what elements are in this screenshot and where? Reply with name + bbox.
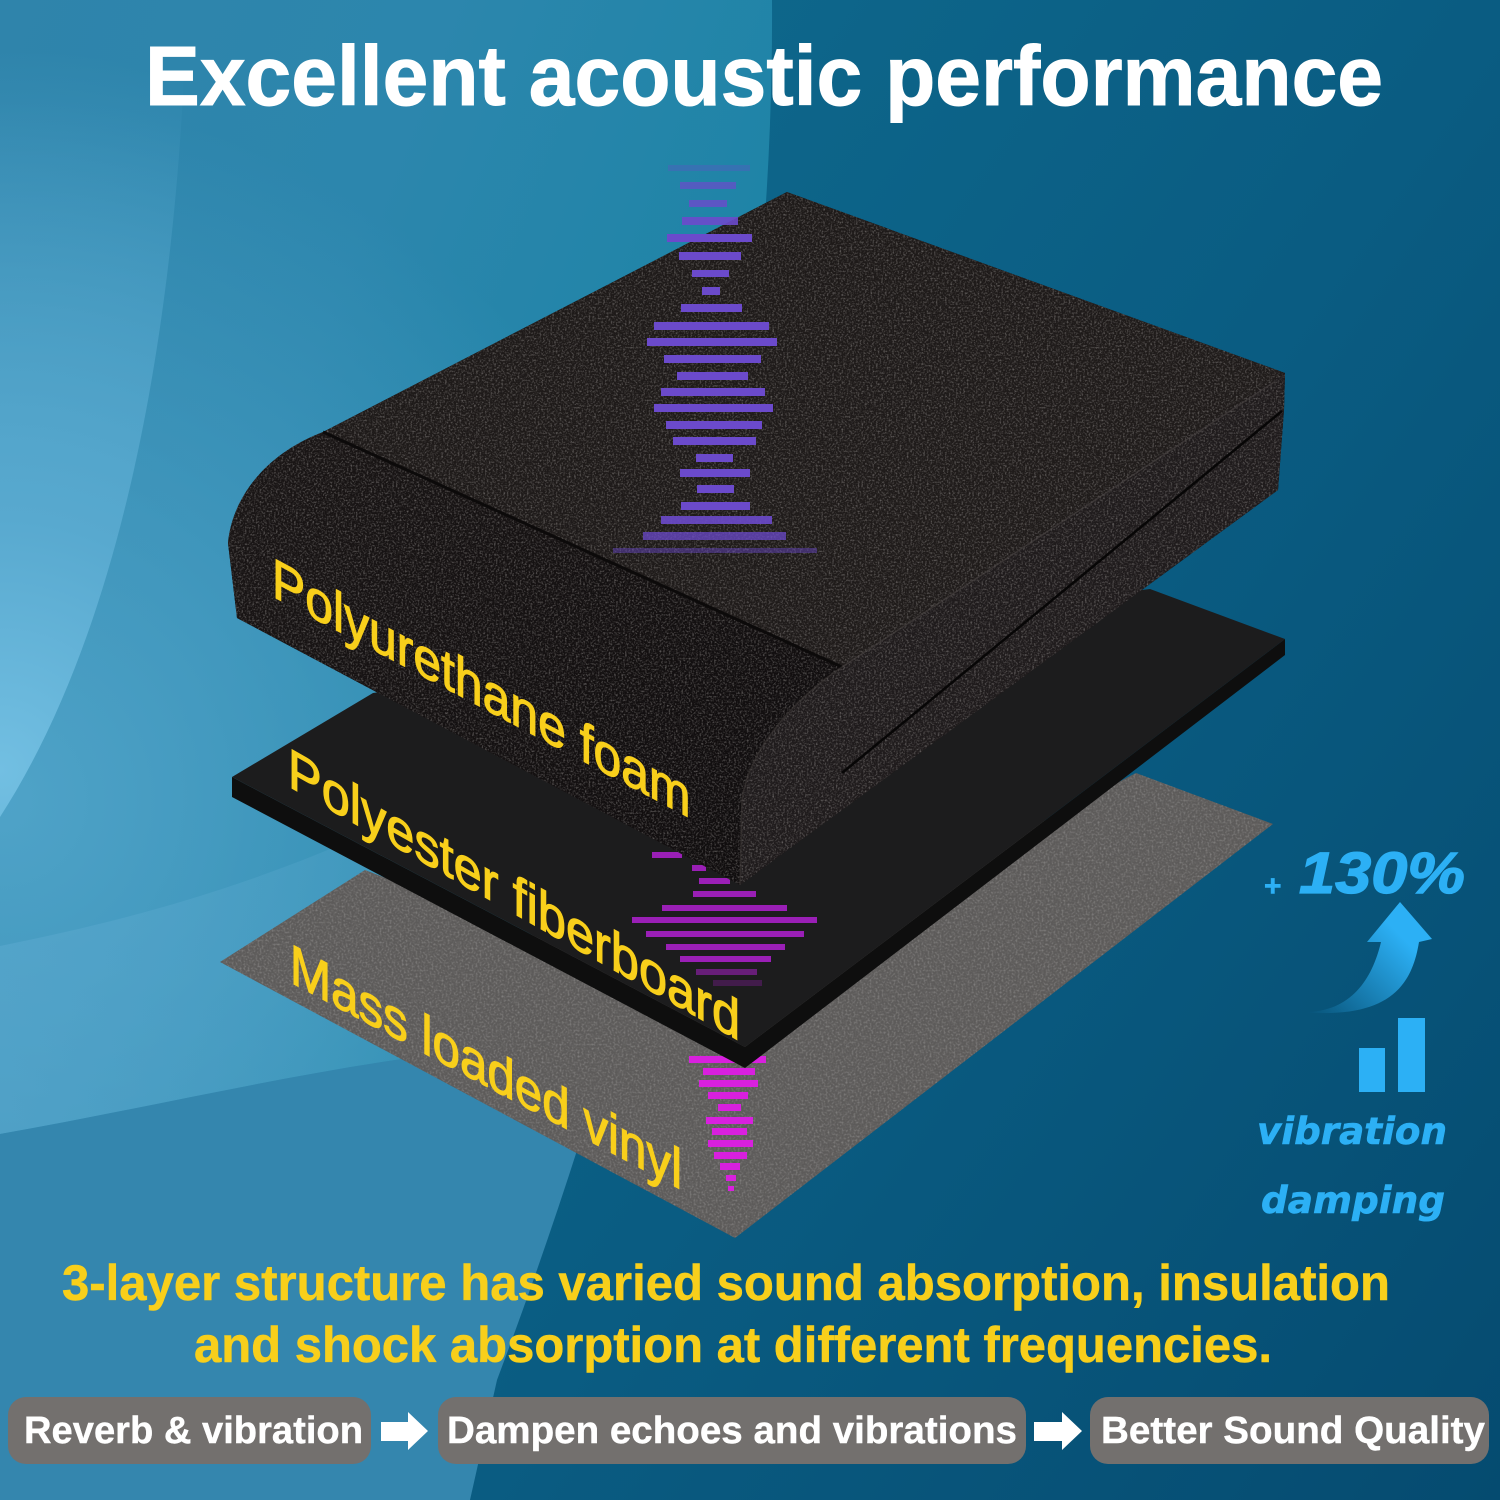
label: vibration: vibration bbox=[1257, 1110, 1447, 1153]
pill: dampen echoes and vibrations bbox=[438, 1397, 1026, 1464]
icon: curved up arrow bbox=[1300, 902, 1432, 1013]
description text bbox=[62, 1255, 1390, 1373]
label: polyester fiberboard: Polyester fiberboard bbox=[288, 735, 740, 1053]
label: damping: damping bbox=[1261, 1179, 1445, 1222]
pill: reverb and vibration: Reverb & vibration bbox=[24, 1410, 363, 1452]
pill: better sound quality bbox=[1090, 1397, 1489, 1464]
pill: reverb and vibration bbox=[8, 1397, 371, 1464]
plus sign: + bbox=[1264, 870, 1282, 903]
layer: mass loaded vinyl bbox=[220, 773, 1273, 1238]
foam rounded front bbox=[228, 432, 842, 885]
label: polyurethane foam: Polyurethane foam bbox=[272, 545, 691, 830]
description text: and shock absorption at different frequencies. bbox=[194, 1317, 1272, 1373]
sound wave: violet bars bbox=[613, 165, 817, 553]
layer: polyurethane foam bbox=[228, 192, 1285, 885]
sound wave: purple bars bbox=[632, 852, 817, 986]
pill: better sound quality: Better Sound Quality bbox=[1101, 1410, 1485, 1452]
sound wave: magenta bars bbox=[689, 1056, 766, 1191]
arrow bbox=[381, 1412, 428, 1450]
foam top face bbox=[323, 192, 1285, 667]
arrow bbox=[1034, 1412, 1082, 1450]
description text: 3-layer structure has varied sound absorption, insulation bbox=[62, 1255, 1390, 1311]
percentage: 130% bbox=[1299, 841, 1465, 906]
pill: dampen echoes and vibrations: Dampen echoes and vibrations bbox=[447, 1410, 1017, 1452]
process flow bbox=[8, 1397, 1489, 1464]
icon: bars bbox=[1359, 1018, 1425, 1092]
callout: +130% vibration damping bbox=[1257, 841, 1465, 1222]
foam right face bbox=[740, 373, 1285, 885]
label: mass loaded vinyl: Mass loaded vinyl bbox=[290, 931, 682, 1202]
title: Excellent acoustic performance bbox=[145, 29, 1383, 123]
layer: polyester fiberboard bbox=[232, 589, 1285, 1068]
